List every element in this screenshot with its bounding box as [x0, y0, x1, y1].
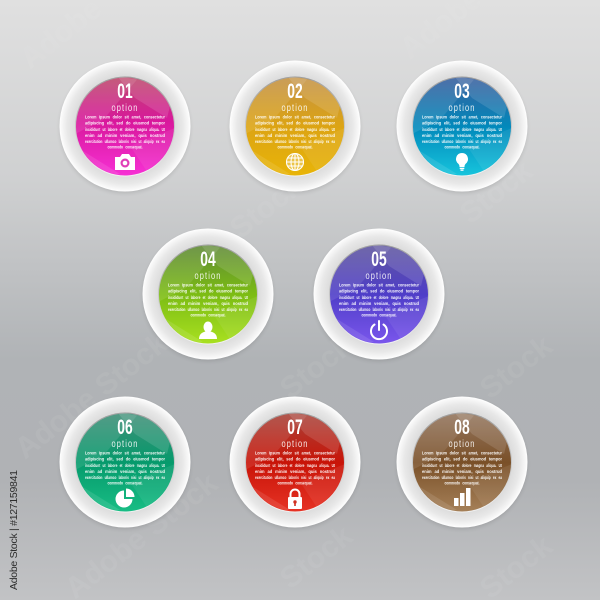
body text: adipiscing elit, sed do eiusmod tempor	[168, 288, 248, 294]
label: option	[366, 271, 392, 282]
body text: exercitation ullamco laboris nisi ut aliquip ex ea	[339, 307, 419, 312]
watermarks: Adobe Stock	[9, 326, 174, 466]
label: option	[282, 103, 308, 114]
body text	[255, 450, 335, 486]
body text: exercitation ullamco laboris nisi ut aliquip ex ea	[85, 139, 165, 144]
number: 02	[287, 79, 303, 103]
body text: enim ad minim veniam, quis nostrud	[422, 133, 502, 138]
body text: commodo consequat.	[362, 313, 396, 318]
body text	[85, 114, 165, 150]
body text: adipiscing elit, sed do eiusmod tempor	[85, 120, 165, 126]
body text: commodo consequat.	[190, 313, 226, 318]
number: 08	[454, 415, 470, 439]
icon: globe	[286, 154, 304, 170]
label: option	[282, 439, 308, 450]
label: option	[112, 439, 138, 450]
watermarks: Stock	[454, 154, 539, 231]
body text: Lorem ipsum dolor sit amet, consectetur	[422, 114, 502, 120]
badge 01	[60, 60, 190, 193]
number: 07	[287, 415, 303, 439]
badge 03	[396, 60, 528, 193]
body text: enim ad minim veniam, quis nostrud	[85, 133, 165, 138]
body text: Lorem ipsum dolor sit amet, consectetur	[85, 114, 165, 120]
body text: commodo consequat.	[444, 145, 480, 150]
body text: adipiscing elit, sed do eiusmod tempor	[85, 456, 165, 462]
badge 07	[230, 396, 360, 529]
badge 04	[142, 228, 274, 361]
icon: light bulb	[456, 153, 468, 171]
body text: Lorem ipsum dolor sit amet, consectetur	[339, 282, 419, 288]
body text	[339, 282, 419, 318]
label: option	[194, 271, 222, 282]
number: 05	[371, 247, 387, 271]
body text: incididunt ut labore et dolore magna aliqua. Ut	[85, 127, 165, 132]
body text	[85, 450, 165, 486]
body text: commodo consequat.	[444, 481, 480, 486]
body text: incididunt ut labore et dolore magna aliqua. Ut	[422, 127, 502, 132]
body text: exercitation ullamco laboris nisi ut aliquip ex ea	[255, 475, 335, 480]
body text: exercitation ullamco laboris nisi ut aliquip ex ea	[168, 307, 248, 312]
number: 01	[117, 79, 133, 103]
body text: exercitation ullamco laboris nisi ut aliquip ex ea	[422, 475, 502, 480]
body text	[422, 450, 502, 486]
number: 06	[117, 415, 133, 439]
badge 05	[314, 228, 444, 361]
body text: incididunt ut labore et dolore magna aliqua. Ut	[255, 463, 335, 468]
body text: enim ad minim veniam, quis nostrud	[339, 301, 419, 306]
body text: adipiscing elit, sed do eiusmod tempor	[255, 120, 335, 126]
body text: enim ad minim veniam, quis nostrud	[168, 301, 248, 306]
body text: commodo consequat.	[278, 145, 312, 150]
icon: power	[371, 321, 387, 339]
credit: Adobe Stock | #127159841	[8, 470, 20, 590]
label: option	[112, 103, 138, 114]
badge 02	[230, 60, 360, 193]
body text	[168, 282, 248, 318]
body text: exercitation ullamco laboris nisi ut aliquip ex ea	[255, 139, 335, 144]
body text	[255, 114, 335, 150]
body text: adipiscing elit, sed do eiusmod tempor	[422, 456, 502, 462]
body text: incididunt ut labore et dolore magna aliqua. Ut	[255, 127, 335, 132]
body text: adipiscing elit, sed do eiusmod tempor	[255, 456, 335, 462]
body text: commodo consequat.	[108, 481, 142, 486]
body text: Lorem ipsum dolor sit amet, consectetur	[168, 282, 248, 288]
number: 03	[454, 79, 470, 103]
watermarks: Stock	[224, 169, 309, 246]
icon: person	[199, 322, 217, 339]
badge 06	[60, 396, 190, 529]
number: 04	[200, 247, 216, 271]
body text: incididunt ut labore et dolore magna aliqua. Ut	[85, 463, 165, 468]
icon: camera	[115, 154, 135, 170]
label: option	[448, 439, 476, 450]
label: option	[448, 103, 476, 114]
icon: padlock	[288, 490, 302, 509]
body text: exercitation ullamco laboris nisi ut aliquip ex ea	[85, 475, 165, 480]
icon: pie chart	[116, 488, 134, 508]
body text: exercitation ullamco laboris nisi ut aliquip ex ea	[422, 139, 502, 144]
body text: enim ad minim veniam, quis nostrud	[422, 469, 502, 474]
body text: incididunt ut labore et dolore magna aliqua. Ut	[339, 295, 419, 300]
body text: enim ad minim veniam, quis nostrud	[85, 469, 165, 474]
body text: Lorem ipsum dolor sit amet, consectetur	[255, 450, 335, 456]
body text	[422, 114, 502, 150]
body text: commodo consequat.	[108, 145, 142, 150]
body text: Lorem ipsum dolor sit amet, consectetur	[255, 114, 335, 120]
watermarks: Stock	[474, 329, 559, 406]
body text: incididunt ut labore et dolore magna aliqua. Ut	[168, 295, 248, 300]
body text: enim ad minim veniam, quis nostrud	[255, 469, 335, 474]
watermarks: Stock	[274, 519, 359, 596]
badge 08	[396, 396, 528, 529]
body text: Lorem ipsum dolor sit amet, consectetur	[85, 450, 165, 456]
body text: adipiscing elit, sed do eiusmod tempor	[422, 120, 502, 126]
watermarks: Stock	[274, 329, 359, 406]
body text: adipiscing elit, sed do eiusmod tempor	[339, 288, 419, 294]
icon: bar chart	[454, 488, 470, 506]
body text: Lorem ipsum dolor sit amet, consectetur	[422, 450, 502, 456]
body text: commodo consequat.	[278, 481, 312, 486]
body text: incididunt ut labore et dolore magna aliqua. Ut	[422, 463, 502, 468]
body text: enim ad minim veniam, quis nostrud	[255, 133, 335, 138]
